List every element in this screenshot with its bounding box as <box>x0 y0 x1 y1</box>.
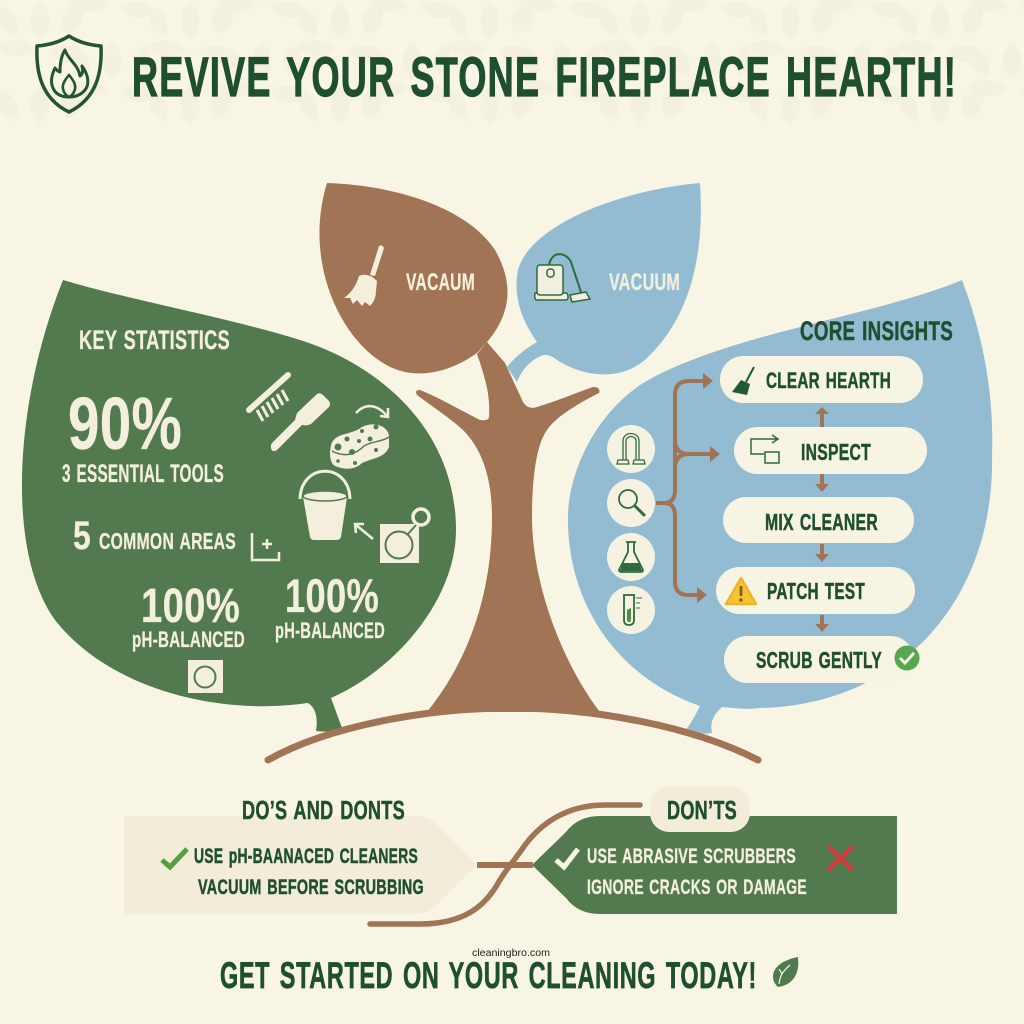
icon circle: flask <box>607 533 655 581</box>
icon: green check <box>162 849 187 867</box>
panel: core insights leaf <box>568 280 992 734</box>
step: scrub gently <box>724 636 920 683</box>
icon: vacuum cleaner <box>535 254 590 302</box>
icon: green check circle <box>894 646 920 670</box>
icon: leaf <box>773 957 798 987</box>
icon: small arrow <box>355 524 373 539</box>
label: ph-balanced right: pH-BALANCED <box>275 618 385 643</box>
step: scrub gently: SCRUB GENTLY <box>756 647 882 673</box>
panel: do's <box>124 816 477 914</box>
panel: key statistics leaf <box>22 280 456 732</box>
icon: inspect frames <box>751 435 779 463</box>
step arrows <box>815 407 829 632</box>
branching connector arrows <box>656 373 720 603</box>
step: inspect: INSPECT <box>801 439 871 465</box>
icon: green broom <box>732 367 754 395</box>
don'ts heading pill <box>650 787 750 832</box>
step: mix cleaner: MIX CLEANER <box>765 509 878 535</box>
icon: scrub brush <box>249 375 288 421</box>
don't text line 2: IGNORE CRACKS OR DAMAGE <box>587 876 807 899</box>
icon: sponge <box>330 424 389 469</box>
icon: bucket <box>300 471 350 540</box>
source url: cleaningbro.com <box>472 948 550 959</box>
step: clear hearth <box>720 356 923 403</box>
icon: flame shield <box>37 36 101 112</box>
icon: curved arrow <box>356 406 388 417</box>
icon: red x <box>828 846 853 870</box>
stat: 100% left: 100% <box>141 580 240 633</box>
do's and donts heading: DO’S AND DONTS <box>242 795 405 825</box>
panel: top brown leaf <box>319 183 507 373</box>
stat: 100% right: 100% <box>285 569 379 622</box>
do text line 1: USE pH-BAANACED CLEANERS <box>194 845 418 868</box>
icon circle: vacuum <box>607 425 655 473</box>
icon: paddle brush <box>271 393 330 451</box>
label: vacaum: VACAUM <box>406 269 475 296</box>
step: inspect <box>734 427 927 474</box>
don't text line 1: USE ABRASIVE SCRUBBERS <box>587 845 796 868</box>
icon: warning triangle <box>726 578 756 604</box>
stat: 90%: 90% <box>68 382 182 465</box>
key statistics heading: KEY STATISTICS <box>79 325 230 355</box>
don'ts heading pill: DON’TS <box>667 795 737 825</box>
panel: top blue leaf <box>507 183 701 382</box>
tree trunk and branches <box>416 342 600 712</box>
icon: ring tag square <box>380 509 429 563</box>
step: mix cleaner <box>723 497 914 543</box>
label: 3 essential tools: 3 ESSENTIAL TOOLS <box>62 460 224 488</box>
label: ph-balanced left: pH-BALANCED <box>132 627 245 652</box>
stat: 5: 5 <box>73 514 91 558</box>
icon: broom <box>344 245 384 306</box>
panel: don'ts <box>532 816 897 914</box>
do text line 2: VACUUM BEFORE SCRUBBING <box>198 876 424 899</box>
core insights heading: CORE INSIGHTS <box>800 316 953 346</box>
icon circle: magnifier <box>607 479 655 527</box>
icon circle: test tube <box>607 586 655 634</box>
connector curves <box>370 805 640 924</box>
header leaf pattern band <box>0 0 1024 125</box>
step: clear hearth: CLEAR HEARTH <box>766 368 891 393</box>
step: patch test <box>716 567 915 614</box>
ground line <box>268 708 758 760</box>
icon: corner plus <box>252 533 279 560</box>
step: patch test: PATCH TEST <box>767 578 865 604</box>
icon: circle square <box>188 660 223 693</box>
icon: white check <box>556 849 578 867</box>
label: vacuum: VACUUM <box>609 269 680 296</box>
label: common areas: COMMON AREAS <box>99 528 236 554</box>
